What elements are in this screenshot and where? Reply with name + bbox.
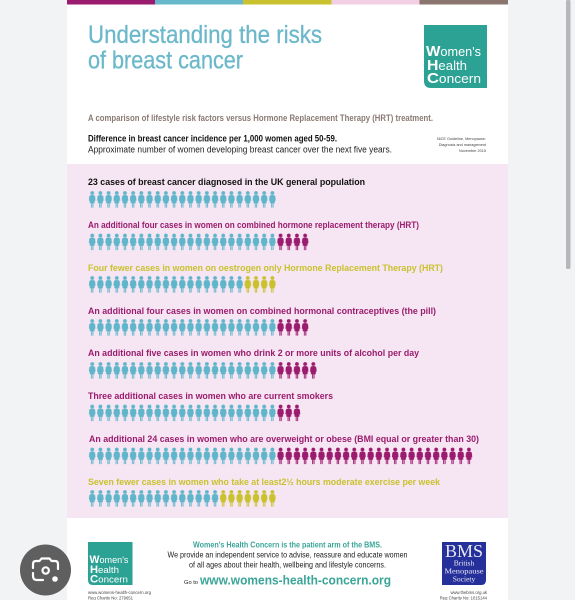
logo: British Menopause Society (442, 541, 486, 585)
footer charity details right: www.thebms.org.uk (450, 590, 488, 595)
top colour bar (67, 0, 508, 4)
row: general population: 23 cases of breast cancer diagnosed in the UK general population (88, 177, 365, 187)
logo: Women's Health Concern (424, 25, 487, 88)
subtitle: A comparison of lifestyle risk factors versus Hormone Replacement Therapy (HRT) treatment. (88, 113, 433, 123)
source note: Diagnosis and management (439, 143, 487, 147)
row: overweight (88, 434, 479, 464)
panel: comparison rows (67, 164, 508, 518)
white poster sheet (67, 0, 508, 600)
footer logo: Women's Health Concern: Concern (90, 574, 128, 586)
title (88, 21, 322, 74)
footer message: We provide an independent service to advise, reassure and educate women (168, 550, 408, 560)
incidence description (88, 134, 392, 154)
footer charity details left (88, 590, 152, 600)
logo: Women's Health Concern: Health (427, 57, 467, 74)
footer charity details right (440, 590, 488, 600)
scrollbar (566, 0, 570, 269)
row: exercise: Seven fewer cases in women who take at least2½ hours moderate exercise per week (88, 477, 441, 487)
row: alcohol: An additional five cases in women who drink 2 or more units of alcohol per day (88, 348, 420, 358)
title: of breast cancer (88, 46, 243, 74)
row: oestrogen only HRT (88, 263, 443, 293)
source note (437, 137, 487, 153)
row: combined HRT (88, 220, 419, 250)
logo: British Menopause Society: Society (453, 574, 475, 584)
row: smokers (88, 391, 333, 422)
footer logo: Women's Health Concern (88, 542, 132, 586)
incidence description: Difference in breast cancer incidence per 1,000 women aged 50-59. (88, 134, 337, 144)
icon: lens button (20, 544, 71, 596)
footer message: Women's Health Concern is the patient arm of the BMS. (193, 540, 382, 550)
source note: NICE Guideline, Menopause: (437, 137, 486, 141)
logo: Women's Health Concern: Women's (426, 43, 481, 60)
row: exercise (88, 477, 441, 507)
logo: British Menopause Society: BMS (445, 541, 483, 561)
row: combined contraceptives (88, 306, 436, 336)
title: Understanding the risks (88, 21, 322, 49)
footer logo: Women's Health Concern: Women's (90, 554, 129, 566)
source note: November 2015 (459, 149, 486, 153)
logo: British Menopause Society: British (454, 558, 474, 568)
incidence description: Approximate number of women developing breast cancer over the next five years. (88, 144, 392, 154)
row: combined HRT: An additional four cases in women on combined hormone replacement therapy (HRT) (88, 220, 419, 230)
footer logo: Women's Health Concern: Health (90, 564, 119, 576)
footer message (168, 540, 408, 570)
footer charity details left: www.womens-health-concern.org (88, 590, 152, 595)
row: oestrogen only HRT: Four fewer cases in women on oestrogen only Hormone Replacement Therapy (HRT) (88, 263, 443, 273)
logo: Women's Health Concern: Concern (427, 70, 481, 87)
row: combined contraceptives: An additional four cases in women on combined hormonal contraceptives (the pill) (88, 306, 436, 316)
row: alcohol (88, 348, 420, 379)
footer website link: www.womens-health-concern.org (199, 574, 391, 588)
row: general population (88, 177, 365, 208)
logo: British Menopause Society: Menopause (444, 566, 484, 576)
footer message: of all ages about their health, wellbeing and lifestyle concerns. (189, 560, 386, 570)
footer website link: Go to (184, 580, 198, 586)
row: smokers: Three additional cases in women who are current smokers (88, 391, 333, 401)
row: overweight: An additional 24 cases in women who are overweight or obese (BMI equal or greater than 30) (89, 434, 479, 444)
